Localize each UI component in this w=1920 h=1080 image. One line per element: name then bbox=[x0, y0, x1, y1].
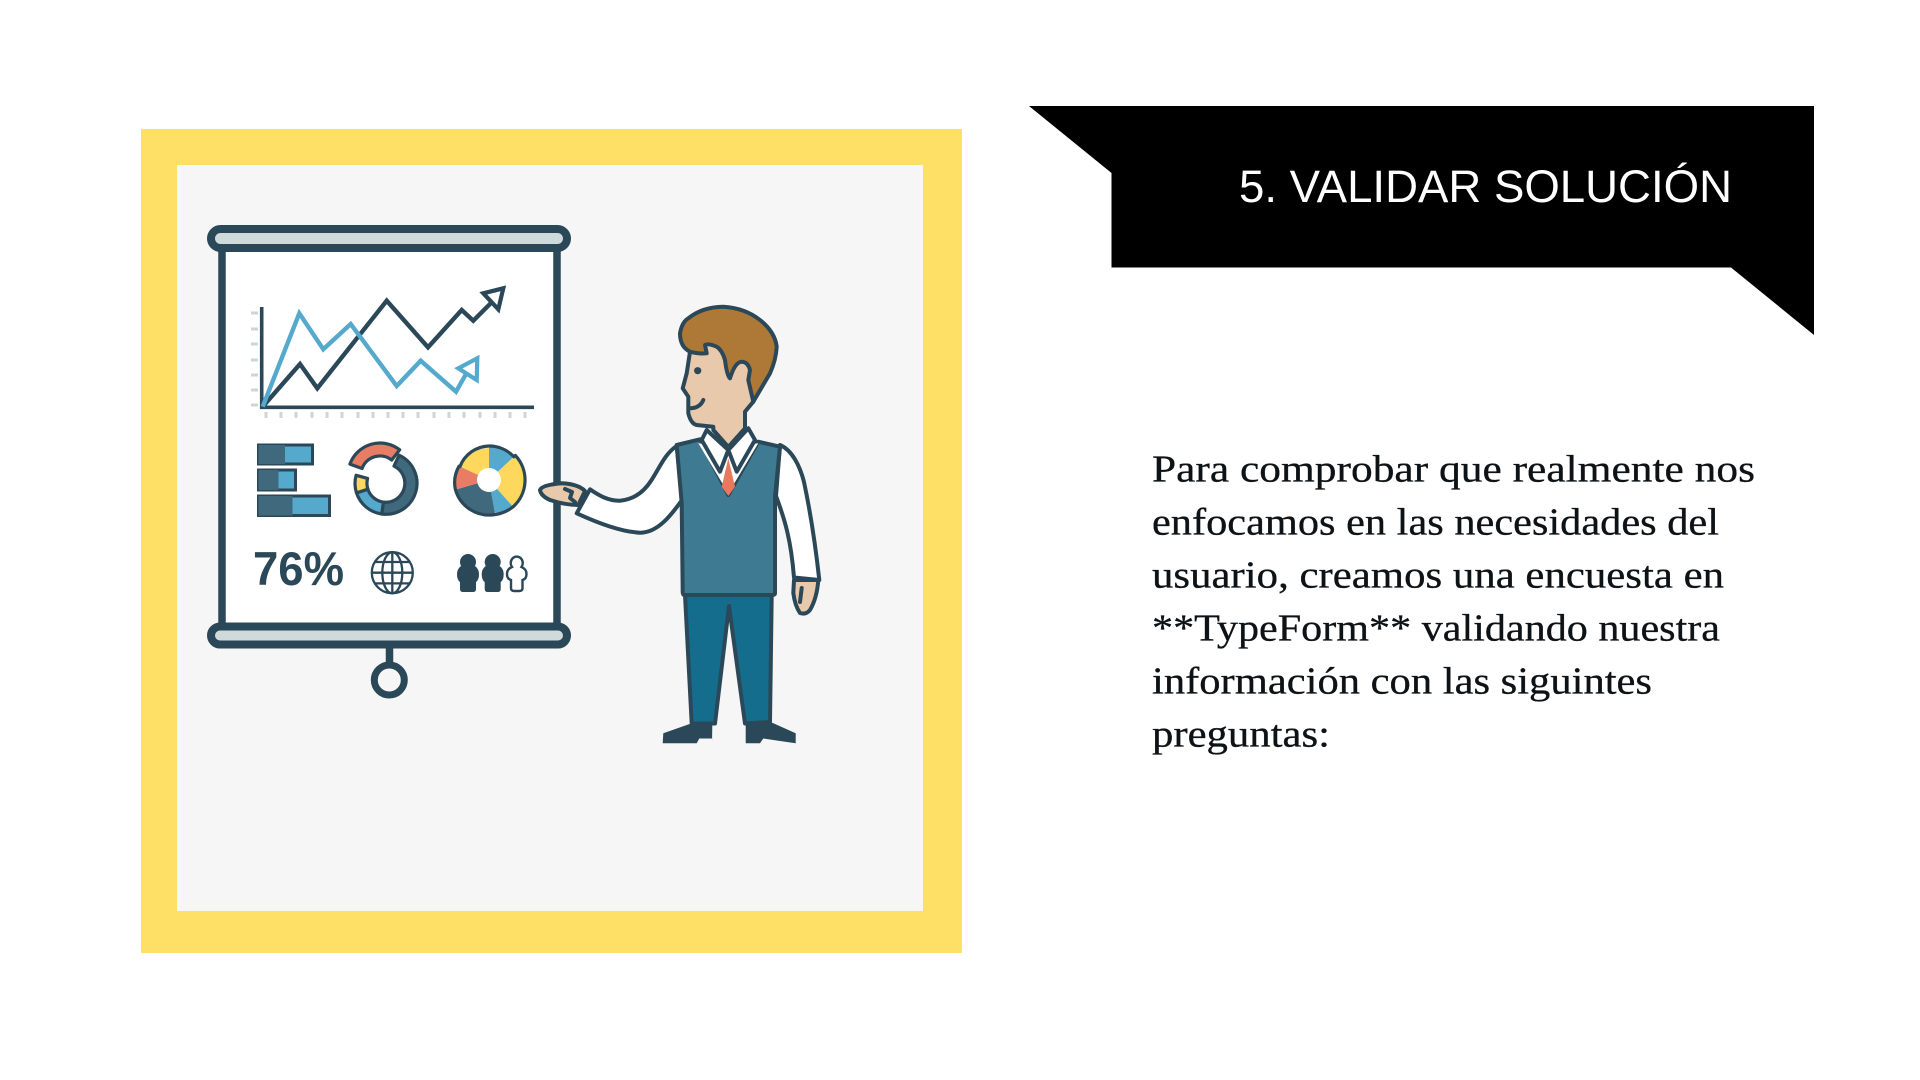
body paragraph: preguntas: bbox=[1152, 713, 1330, 755]
body paragraph bbox=[1152, 448, 1755, 755]
necktie bbox=[722, 458, 735, 496]
body paragraph: información con las siguintes bbox=[1152, 660, 1652, 702]
screen sheet bbox=[222, 248, 557, 626]
bottom roller bbox=[211, 626, 567, 644]
pointing arm bbox=[540, 446, 682, 533]
top roller bbox=[211, 229, 567, 248]
horizontal bars bbox=[258, 445, 330, 516]
donut chart bbox=[350, 443, 417, 514]
illustration: presenter man bbox=[540, 307, 819, 743]
body paragraph: **TypeForm** validando nuestra bbox=[1152, 607, 1720, 649]
illustration: presentation screen bbox=[211, 229, 567, 695]
percentage label: 76% bbox=[253, 542, 344, 595]
pull cord and ring bbox=[374, 648, 404, 695]
trousers bbox=[685, 595, 772, 724]
line chart bbox=[251, 288, 534, 418]
chart axis ticks bbox=[251, 313, 525, 418]
body paragraph: enfocamos en las necesidades del bbox=[1152, 501, 1719, 543]
banner shape bbox=[1029, 106, 1814, 335]
hair bbox=[680, 307, 777, 402]
shirt front bbox=[698, 443, 758, 493]
pie chart bbox=[455, 446, 525, 515]
icon: people bbox=[457, 554, 526, 592]
banner title: 5. VALIDAR SOLUCIÓN bbox=[1239, 161, 1732, 212]
body paragraph: Para comprobar que realmente nos bbox=[1152, 448, 1755, 490]
eye bbox=[694, 367, 701, 374]
blue data line bbox=[263, 313, 477, 407]
neck and face bbox=[683, 335, 753, 447]
collar bbox=[702, 428, 755, 472]
dark data line bbox=[263, 288, 503, 407]
shoes bbox=[663, 722, 796, 743]
chart axes bbox=[262, 307, 534, 407]
icon: globe bbox=[372, 552, 413, 593]
right arm bbox=[776, 445, 819, 614]
vest bbox=[677, 439, 780, 595]
title banner bbox=[1029, 106, 1814, 335]
body paragraph: usuario, creamos una encuesta en bbox=[1152, 554, 1724, 596]
panel: yellow illustration frame bbox=[141, 129, 962, 953]
smile bbox=[690, 400, 703, 408]
